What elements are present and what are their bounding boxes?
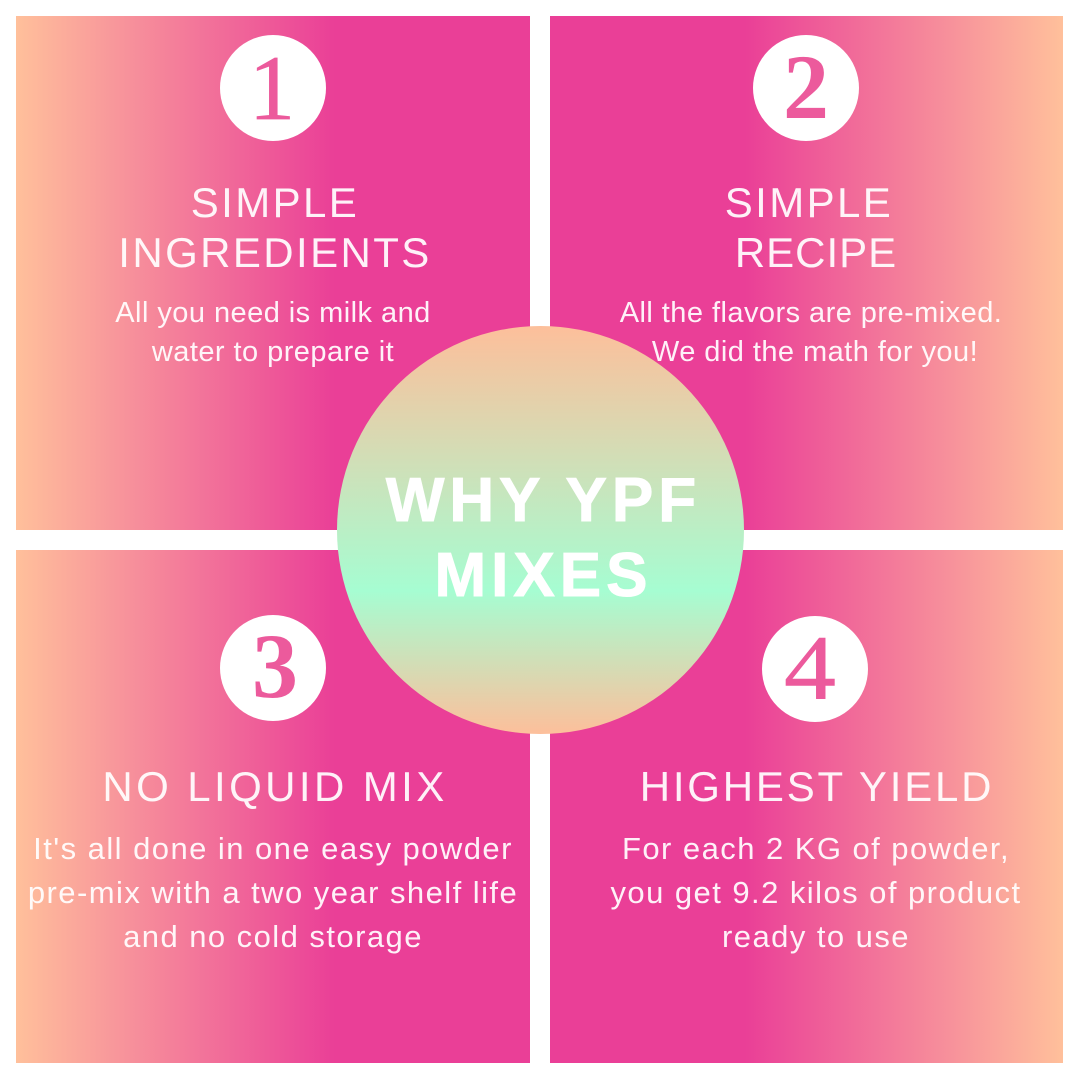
icon: number 1 bbox=[220, 35, 326, 141]
heading: simple ingredients: SIMPLE bbox=[191, 179, 359, 226]
panel: simple recipe bbox=[550, 16, 1063, 530]
heading: simple recipe: SIMPLE bbox=[725, 179, 893, 226]
heading: simple ingredients bbox=[118, 179, 432, 276]
heading: simple recipe: RECIPE bbox=[735, 229, 897, 276]
panel: no liquid mix bbox=[16, 550, 530, 1063]
text: simple recipe description: All the flavors are pre-mixed. bbox=[620, 297, 1002, 329]
text: highest yield description bbox=[610, 831, 1022, 954]
icon: number 2 bbox=[753, 35, 859, 141]
center circle: why YPF mixes bbox=[337, 326, 744, 734]
text: simple recipe description bbox=[620, 297, 1002, 368]
heading: simple recipe bbox=[725, 179, 897, 276]
text: simple ingredients description bbox=[115, 297, 431, 368]
heading: highest yield: HIGHEST YIELD bbox=[640, 763, 994, 810]
icon: number 2: 2 bbox=[783, 36, 829, 138]
icon: number 1: 1 bbox=[249, 37, 295, 139]
text: simple ingredients description: All you need is milk and bbox=[115, 297, 431, 329]
text: no liquid mix description: and no cold storage bbox=[123, 919, 423, 954]
heading: simple ingredients: INGREDIENTS bbox=[118, 229, 432, 276]
text: highest yield description: you get 9.2 kilos of product bbox=[610, 875, 1022, 910]
text: highest yield description: For each 2 KG of powder, bbox=[622, 831, 1010, 866]
heading: no liquid mix: NO LIQUID MIX bbox=[102, 763, 448, 810]
text: no liquid mix description: pre-mix with a two year shelf life bbox=[28, 875, 518, 910]
icon: number 4 bbox=[762, 616, 868, 722]
center title bbox=[385, 466, 701, 610]
text: no liquid mix description bbox=[28, 831, 518, 954]
center title: MIXES bbox=[435, 541, 652, 610]
center title: WHY YPF bbox=[386, 466, 701, 535]
text: simple ingredients description: water to prepare it bbox=[152, 336, 394, 368]
icon: number 4: 4 bbox=[784, 617, 836, 719]
panel: simple ingredients bbox=[16, 16, 530, 530]
text: highest yield description: ready to use bbox=[722, 919, 910, 954]
text: no liquid mix description: It's all done in one easy powder bbox=[33, 831, 513, 866]
icon: number 3 bbox=[220, 615, 326, 721]
text: simple recipe description: We did the math for you! bbox=[652, 336, 978, 368]
icon: number 3: 3 bbox=[252, 615, 298, 717]
panel: highest yield bbox=[550, 550, 1063, 1063]
